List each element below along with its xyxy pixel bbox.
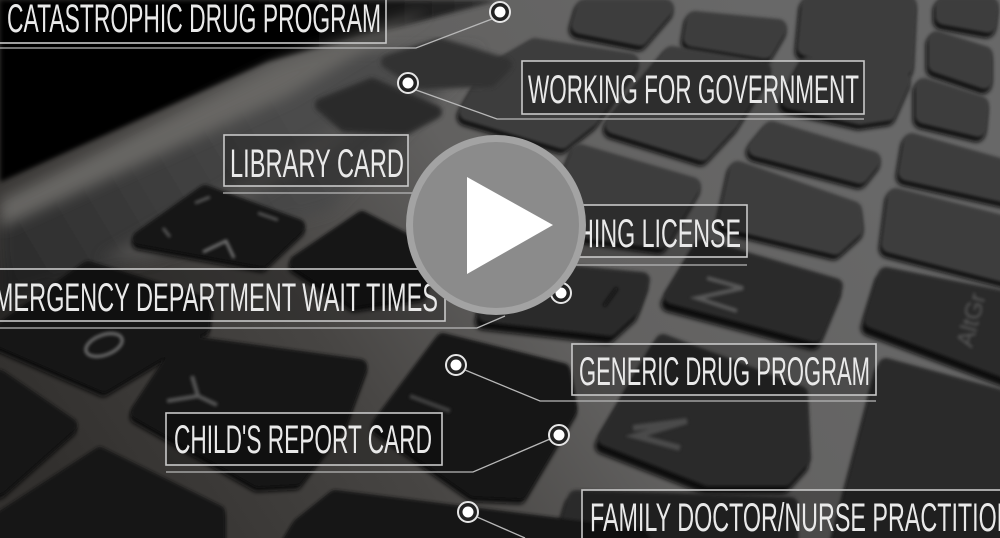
label: generic drug program bbox=[465, 344, 876, 401]
faded key legends bbox=[83, 197, 992, 448]
label: emergency department wait times bbox=[0, 269, 505, 328]
label: library card: LIBRARY CARD bbox=[230, 142, 404, 186]
laptop bezel bbox=[0, 50, 480, 300]
play button bbox=[406, 135, 586, 315]
label: child's report card: CHILD'S REPORT CARD bbox=[174, 418, 432, 462]
label: fishing license (partly hidden by play button): FISHING LICENSE bbox=[541, 212, 741, 256]
label: child's report card bbox=[166, 413, 550, 472]
marker: child's report card bbox=[549, 425, 569, 445]
label: fishing license (partly hidden by play button) bbox=[535, 205, 747, 265]
marker: working for government bbox=[398, 73, 418, 93]
faded key legends: AltGr bbox=[952, 290, 992, 350]
label: working for government bbox=[416, 61, 864, 119]
connector: family doctor bbox=[477, 517, 525, 538]
marker: family doctor bbox=[458, 502, 478, 522]
marker: emergency department bbox=[551, 283, 571, 303]
label: catastrophic drug program bbox=[0, 0, 492, 48]
marker: generic drug program bbox=[446, 355, 466, 375]
marker: catastrophic bbox=[490, 2, 510, 22]
label: emergency department wait times: EMERGENCY DEPARTMENT WAIT TIMES bbox=[0, 276, 438, 320]
play triangle bbox=[467, 177, 553, 274]
label: library card bbox=[223, 135, 415, 193]
